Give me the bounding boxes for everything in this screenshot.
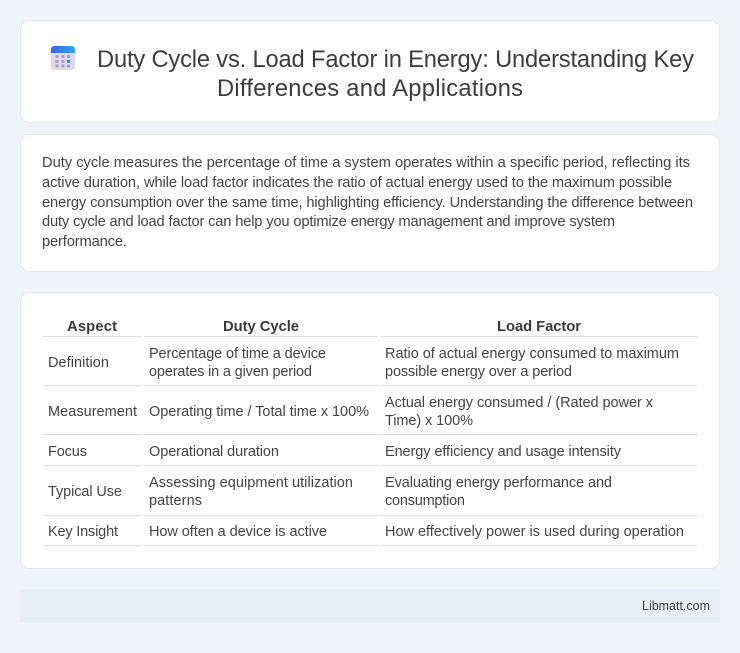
panel: summary xyxy=(20,134,720,272)
row: focus: Focus xyxy=(48,444,87,460)
row: key insight: Key Insight xyxy=(48,524,118,540)
row: measurement xyxy=(48,395,654,429)
heading xyxy=(97,47,694,102)
row: definition: operates in a given period xyxy=(149,364,312,380)
heading: Differences and Applications xyxy=(217,76,523,102)
row: focus xyxy=(48,444,622,460)
icon: calendar xyxy=(51,46,75,70)
row: focus: Operational duration xyxy=(149,444,279,460)
text block: summary paragraph: active duration, while load factor indicates the ratio of actual energy used to the maximum possible xyxy=(42,175,672,191)
footer: Libmatt.com xyxy=(642,599,710,613)
row: definition: Ratio of actual energy consumed to maximum xyxy=(385,346,679,362)
row: measurement: Time) x 100% xyxy=(385,413,473,429)
row: definition: Definition xyxy=(48,355,109,371)
heading: Duty Cycle vs. Load Factor in Energy: Understanding Key xyxy=(97,47,694,73)
row: key insight: How effectively power is used during operation xyxy=(385,524,684,540)
footer xyxy=(20,589,720,623)
text block: summary paragraph: performance. xyxy=(42,234,127,250)
row: definition: possible energy over a period xyxy=(385,364,572,380)
row: typical use: Assessing equipment utilization xyxy=(149,475,353,491)
row: key insight: How often a device is active xyxy=(149,524,327,540)
panel: title xyxy=(20,20,720,122)
text block: summary paragraph xyxy=(42,155,693,250)
table header: Aspect xyxy=(67,319,117,335)
table header: Load Factor xyxy=(497,319,581,335)
row: measurement: Actual energy consumed / (Rated power x xyxy=(385,395,654,411)
row: focus: Energy efficiency and usage intensity xyxy=(385,444,622,460)
text block: summary paragraph: energy consumption over the same time, highlighting efficiency. Understanding the difference between xyxy=(42,195,693,211)
row: definition: Percentage of time a device xyxy=(149,346,326,362)
row: measurement: Operating time / Total time x 100% xyxy=(149,404,369,420)
text block: summary paragraph: Duty cycle measures the percentage of time a system operates within a specific period, reflecting its xyxy=(42,155,690,171)
row: typical use: Evaluating energy performance and xyxy=(385,475,612,491)
row: definition xyxy=(48,346,679,380)
row: typical use: Typical Use xyxy=(48,484,122,500)
row: typical use xyxy=(48,475,612,509)
row: key insight xyxy=(48,524,684,540)
table header: Duty Cycle xyxy=(223,319,299,335)
row: typical use: consumption xyxy=(385,493,465,509)
text block: summary paragraph: duty cycle and load factor can help you optimize energy management and improve system xyxy=(42,214,615,230)
row: typical use: patterns xyxy=(149,493,202,509)
panel: comparison table xyxy=(20,292,720,568)
row: measurement: Measurement xyxy=(48,404,137,420)
table header xyxy=(67,319,581,335)
